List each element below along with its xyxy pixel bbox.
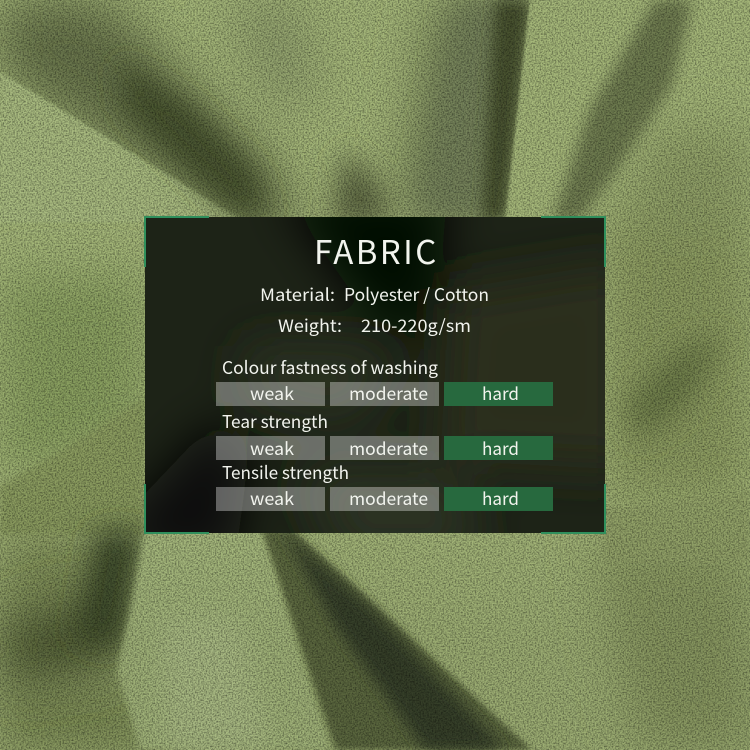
corner brackets: [144, 216, 606, 534]
dark wedge bottom centre: [262, 530, 532, 750]
rating: tear strength: Tear strength: [222, 409, 328, 434]
panel inner shadows: [145, 217, 605, 533]
rating: tensile strength: weak: [250, 486, 294, 511]
rating: tear strength: moderate: [349, 436, 428, 461]
left lower fold: [0, 398, 145, 535]
rating: tensile strength: Tensile strength: [222, 460, 349, 485]
light fold, left: [0, 72, 245, 222]
vertical fold shadow core: [482, 0, 530, 220]
rating: tear strength: hard: [482, 436, 519, 461]
light area right of vertical fold: [505, 0, 640, 222]
rating: tensile strength: moderate: [349, 486, 428, 511]
rating: colour fastness of washing: [216, 355, 553, 406]
panel: fabric specifications: [144, 216, 606, 534]
rating: tear strength: weak: [250, 436, 294, 461]
weight line: Weight:: [278, 312, 342, 337]
diagonal shadow upper right: [552, 0, 692, 222]
rating: colour fastness of washing: Colour fastness of washing: [222, 355, 438, 380]
rating: colour fastness of washing: moderate: [349, 381, 428, 406]
weight value: 210-220g/sm: [361, 313, 471, 338]
material value: Polyester / Cotton: [344, 282, 489, 307]
title: FABRIC: [314, 226, 439, 274]
right lower fold: [605, 490, 750, 560]
rating: tear strength: [216, 409, 553, 461]
rating: colour fastness of washing: weak: [250, 381, 294, 406]
light band bottom left: [117, 530, 330, 750]
rating: colour fastness of washing: hard: [482, 381, 519, 406]
material line: Material:: [260, 281, 335, 306]
rating: tensile strength: hard: [482, 486, 519, 511]
rating: tensile strength: [216, 460, 553, 511]
